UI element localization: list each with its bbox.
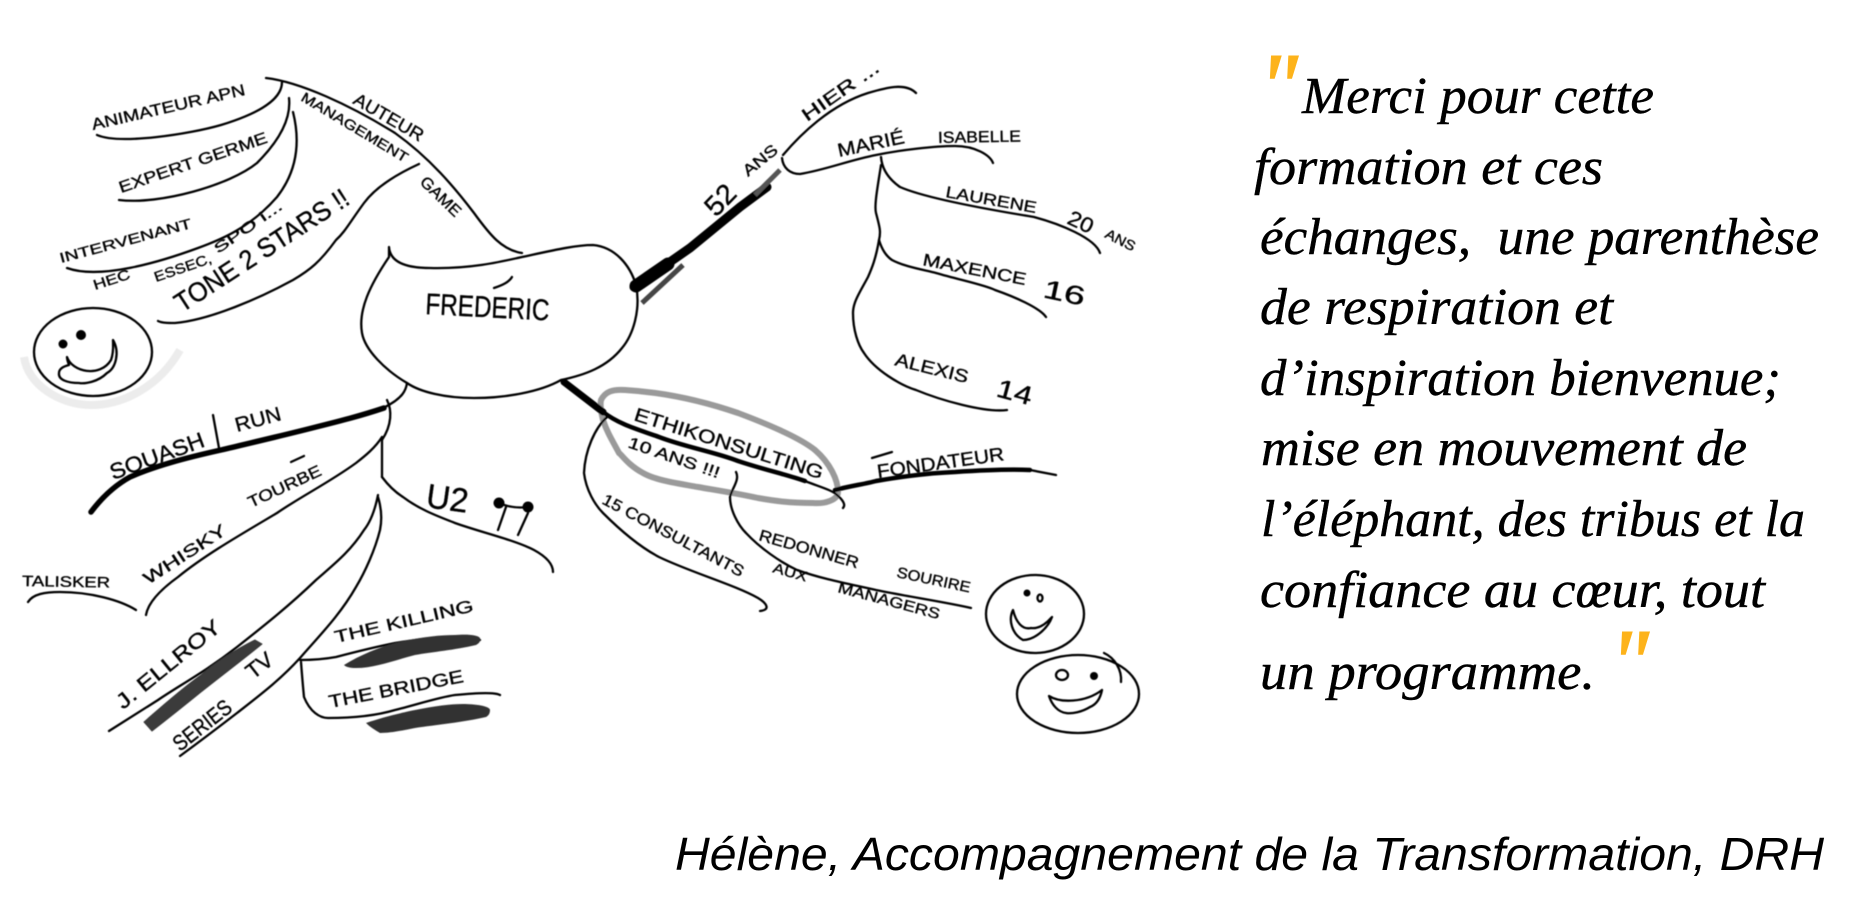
branch: interests: U2	[424, 477, 471, 521]
quote line 6: mise en mouvement de	[1261, 420, 1747, 477]
quote line 2: formation et ces	[1254, 139, 1603, 196]
branch: 52 ans and family: HIER ...	[798, 57, 883, 125]
branch: interests: TOURBE	[246, 463, 324, 512]
branch: 52 ans and family	[634, 57, 1138, 411]
branch: 52 ans and family: 14	[993, 373, 1036, 411]
branch: 52 ans and family: LAURENE	[944, 184, 1038, 217]
scribble: The Bridge	[366, 704, 490, 733]
quote line 7: l’éléphant, des tribus et la	[1261, 491, 1805, 548]
scribble: The Killing	[344, 635, 480, 668]
branch: interests: J. ELLROY	[112, 615, 226, 714]
branch: Ethikonsulting: 10 ANS !!!	[626, 435, 722, 482]
icon: smiley right upper	[986, 575, 1084, 653]
branch: Auteur and career: SPO i...	[211, 197, 285, 256]
branch: Auteur and career	[58, 78, 522, 323]
quote line 8: confiance au cœur, tout	[1260, 562, 1767, 619]
mind map sketch	[22, 57, 1139, 756]
branch: 52 ans and family: ANS	[1103, 225, 1138, 254]
branch: Ethikonsulting	[564, 382, 1056, 623]
branch: Auteur and career: GAME	[416, 174, 464, 221]
branch: 52 ans and family: 20	[1064, 207, 1097, 239]
branch: interests: THE KILLING	[333, 596, 475, 647]
branch: Auteur and career: MANAGEMENT	[298, 89, 412, 166]
branch: interests	[22, 383, 553, 756]
quote line 9: un programme.	[1260, 644, 1595, 701]
branch: Ethikonsulting: MANAGERS	[836, 579, 942, 623]
branch: interests: RUN	[233, 403, 284, 437]
quote line 5: d’inspiration bienvenue;	[1260, 350, 1781, 407]
branch: interests: SERIES	[168, 694, 237, 756]
icon: U2 drawn symbol	[494, 498, 534, 535]
branch: Auteur and career: AUTEUR	[350, 89, 428, 145]
icon: smiley right lower	[1017, 653, 1139, 733]
closing quote mark: "	[1610, 611, 1649, 713]
branch: 52 ans and family: 16	[1041, 274, 1088, 312]
branch: Ethikonsulting: SOURIRE	[895, 564, 972, 597]
attribution: Hélène, Accompagnement de la Transformation, DRH	[675, 828, 1825, 880]
icon: smiley left	[24, 308, 180, 405]
branch: 52 ans and family: ANS	[740, 142, 782, 180]
scribble: J. Ellroy	[144, 640, 262, 731]
branch: Ethikonsulting: ETHIKONSULTING	[631, 405, 826, 484]
branch: 52 ans and family: ISABELLE	[938, 129, 1021, 147]
branch: interests: TALISKER	[22, 573, 110, 592]
quote line 4: de respiration et	[1260, 279, 1615, 336]
branch: 52 ans and family: MAXENCE	[921, 250, 1028, 289]
central node: Frederic: FREDERIC	[425, 288, 550, 327]
branch: Auteur and career: HEC	[91, 266, 132, 293]
branch: Ethikonsulting: 15 CONSULTANTS	[599, 492, 747, 581]
branch: interests: THE BRIDGE	[327, 666, 465, 712]
branch: Auteur and career: EXPERT GERME	[117, 130, 270, 197]
branch: Auteur and career: TONE 2 STARS !!	[169, 183, 355, 318]
branch: Auteur and career: ANIMATEUR APN	[90, 82, 247, 134]
branch: Ethikonsulting: AUX	[771, 560, 810, 585]
branch: interests: SQUASH	[106, 427, 208, 485]
quote line 3: échanges, une parenthèse	[1260, 209, 1819, 266]
central node: Frederic	[361, 245, 638, 398]
branch: 52 ans and family: 52	[698, 178, 743, 222]
branch: Ethikonsulting: REDONNER	[757, 528, 861, 572]
branch: Auteur and career: ESSEC,	[152, 250, 214, 285]
testimonial quote	[1254, 35, 1819, 713]
branch: Auteur and career: INTERVENANT	[58, 215, 194, 266]
branch: interests: TV	[241, 647, 278, 684]
quote line 1: Merci pour cette	[1301, 68, 1654, 125]
branch: Ethikonsulting: FONDATEUR	[876, 444, 1005, 483]
opening quote mark: "	[1259, 35, 1298, 137]
branch: 52 ans and family: ALEXIS	[893, 349, 971, 387]
branch: interests: WHISKY	[140, 521, 230, 588]
branch: 52 ans and family: MARIÉ	[836, 127, 907, 162]
